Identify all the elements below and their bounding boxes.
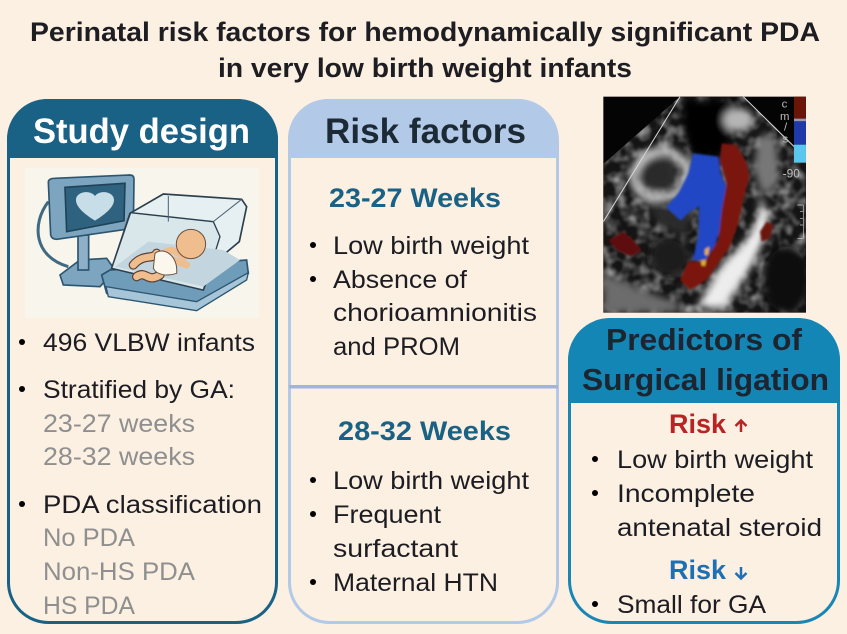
icon: down arrow [736,567,746,578]
risk increased: Risk [669,409,727,439]
heading: risk factors: Risk factors [325,112,526,151]
risk factors 23-27 weeks [310,183,537,361]
study design bullet list [19,329,262,620]
echocardiogram image: s [783,134,789,146]
study design bullet list: PDA classification [43,491,262,519]
study design bullet list: 496 VLBW infants [43,329,255,357]
panel header: risk factors [288,99,558,158]
increased risk bullets: antenatal steroid [617,514,822,542]
panel: study design [7,99,278,622]
risk factors 28-32 weeks: Low birth weight [333,467,529,495]
increased risk bullets [592,446,822,542]
icon: infant in incubator with heart monitor [25,168,259,318]
risk factors 28-32 weeks: Maternal HTN [333,569,498,597]
title: Perinatal risk factors for hemodynamically significant PDA [30,17,820,47]
study design bullet list: 23-27 weeks [43,410,195,438]
risk factors 23-27 weeks: Low birth weight [333,232,529,260]
increased risk bullets: Incomplete [617,480,755,508]
heading: study design: Study design [33,112,250,151]
study design bullet list: HS PDA [43,592,135,620]
increased risk bullets: Low birth weight [617,446,813,474]
icon: up arrow [736,420,746,432]
panel: predictors of surgical ligation [568,318,840,622]
risk factors 23-27 weeks: Absence of [333,266,467,294]
risk decreased: Risk [669,555,727,585]
risk factors 28-32 weeks: surfactant [333,535,458,563]
risk factors 28-32 weeks [310,416,529,597]
echocardiogram image: / [784,122,788,134]
heading: predictors [582,322,829,397]
risk factors 23-27 weeks: 23-27 Weeks [329,183,501,213]
echocardiogram image: -90 [783,166,800,180]
study design bullet list: Stratified by GA: [43,376,235,404]
title: in very low birth weight infants [218,53,632,83]
echocardiogram image: m [780,111,789,123]
echocardiogram image: c [782,98,788,110]
panel header: study design [7,99,278,158]
risk factors 28-32 weeks: Frequent [333,501,441,529]
echocardiogram image [603,97,810,313]
study design bullet list: 28-32 weeks [43,443,195,471]
heading: predictors: Predictors of [606,322,803,357]
title [30,17,820,83]
panel header: predictors [568,318,840,403]
study design bullet list: Non-HS PDA [43,558,195,586]
panel: risk factors [288,99,558,622]
risk factors 23-27 weeks: chorioamnionitis [333,299,537,327]
heading: predictors: Surgical ligation [582,362,829,397]
decreased risk bullet: Small for GA [617,591,766,619]
study design bullet list: No PDA [43,524,135,552]
risk factors 28-32 weeks: 28-32 Weeks [338,416,511,446]
risk factors 23-27 weeks: and PROM [333,333,460,361]
